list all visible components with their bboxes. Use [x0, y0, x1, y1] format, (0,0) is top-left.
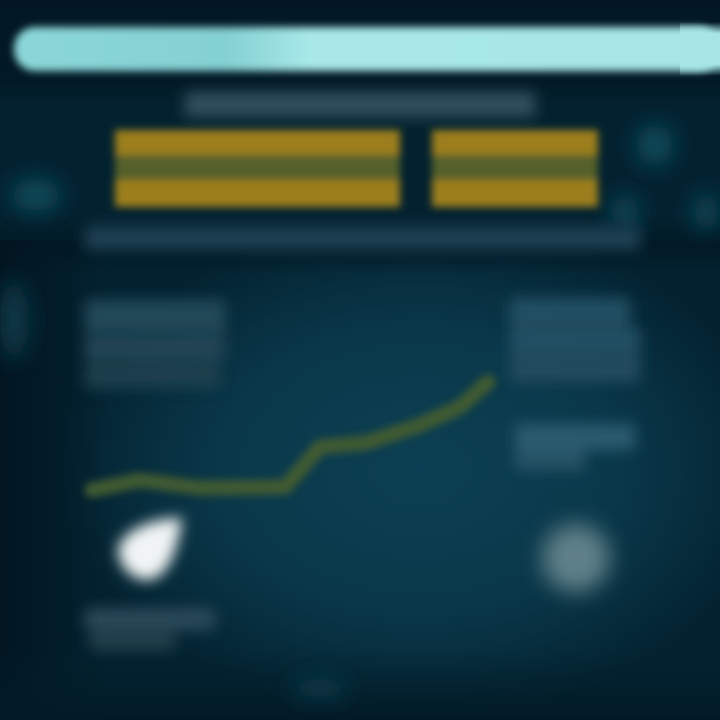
- left text block: [85, 300, 225, 388]
- right lower text block: [515, 424, 635, 470]
- top banner bar: [14, 22, 720, 76]
- line chart trend: [92, 382, 488, 490]
- icon: grey circle: [542, 524, 610, 592]
- right text block: [510, 298, 640, 382]
- subtitle line: [85, 226, 640, 250]
- heading line: [185, 92, 535, 117]
- icon: white badge: [118, 518, 182, 580]
- title highlight blocks: [115, 130, 598, 207]
- caption text block: [85, 608, 215, 650]
